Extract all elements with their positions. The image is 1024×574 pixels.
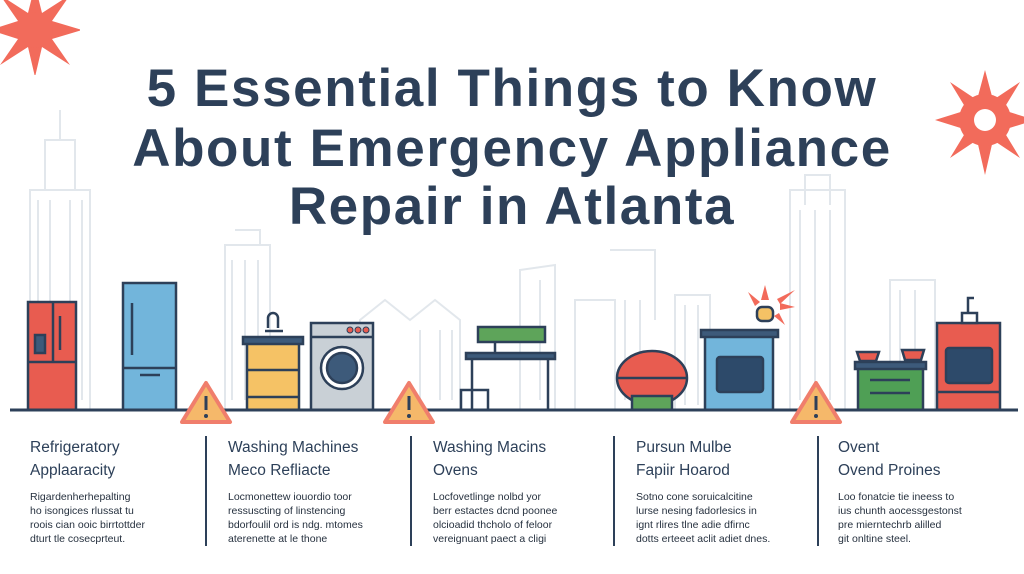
sun burst right [935, 70, 1024, 175]
panel: column 5: pre mierntechrb alilled [838, 519, 941, 531]
panel: column 4: Fapiir Hoarod [636, 462, 730, 479]
panel: column 5: ius chunth aocessgestonst [838, 505, 962, 517]
icon: table with sign [461, 327, 555, 410]
panel: column 1 [30, 439, 145, 545]
panel: column 4: Sotno cone soruicalcitine [636, 491, 753, 503]
panel: column 5 [838, 439, 962, 545]
panel: column 2: aterenette at le thone [228, 533, 327, 545]
title: Repair in Atlanta [289, 177, 735, 236]
panel: column 5: git onltine steel. [838, 533, 911, 545]
title: 5 Essential Things to Know [147, 59, 877, 118]
panel: column 1: Refrigeratory [30, 439, 120, 456]
title: About Emergency Appliance [132, 119, 892, 178]
panel: column 1: Rigardenherhepalting [30, 491, 130, 503]
panel: column 3: berr estactes dcnd poonee [433, 505, 557, 517]
icon: blue oven with burst [701, 285, 795, 410]
icon: red oven [937, 298, 1000, 410]
title [132, 59, 892, 236]
panel: column 5: Ovend Proines [838, 462, 941, 479]
panel: column 4: lurse nesing fadorlesics in [636, 505, 757, 517]
panel: column 3: vereignuant paect a cligi [433, 533, 546, 545]
panel: column 3: Ovens [433, 462, 478, 479]
panel: column 3: olcioadid thcholo of feloor [433, 519, 552, 531]
icon: red pot [617, 351, 687, 410]
panel: column 3: Washing Macins [433, 439, 546, 456]
panel: column 3: Locfovetlinge nolbd yor [433, 491, 541, 503]
panel: column 4: ignt rlires tlne adie dfirnc [636, 519, 750, 531]
panel: column 2: Washing Machines [228, 439, 358, 456]
icon: warning 3 [792, 383, 840, 422]
panel: column 1: roois cian ooic birrtottder [30, 519, 145, 531]
sun burst top-left [0, 0, 80, 75]
panel: column 5: Loo fonatcie tie ineess to [838, 491, 954, 503]
icon: warning 2 [385, 383, 433, 422]
panel: column 2: bdorfoulil ord is ndg. mtomes [228, 519, 363, 531]
panel: column 2: Meco Refliacte [228, 462, 331, 479]
panel: column 1: Applaaracity [30, 462, 115, 479]
panel: column 2: ressuscting of linstencing [228, 505, 345, 517]
panel: column 1: ho isongices rlussat tu [30, 505, 134, 517]
panel: column 4: Pursun Mulbe [636, 439, 732, 456]
panel: column 3 [433, 439, 557, 545]
panel: column 2: Locmonettew iouordio toor [228, 491, 352, 503]
ground line [10, 408, 1018, 412]
icon: sink cabinet [243, 313, 303, 410]
icon: green stove [855, 350, 926, 410]
panel: column 4 [636, 439, 770, 545]
icon: warning 1 [182, 383, 230, 422]
icon: red fridge [28, 302, 76, 410]
panel: column 2 [228, 439, 363, 545]
panel: column 1: dturt tle cosecprteut. [30, 533, 125, 545]
icon: washing machine [311, 323, 373, 410]
panel: column 4: dotts erteeet aclit adiet dnes. [636, 533, 770, 545]
icon: blue fridge [123, 283, 176, 410]
panel: column 5: Ovent [838, 439, 879, 456]
